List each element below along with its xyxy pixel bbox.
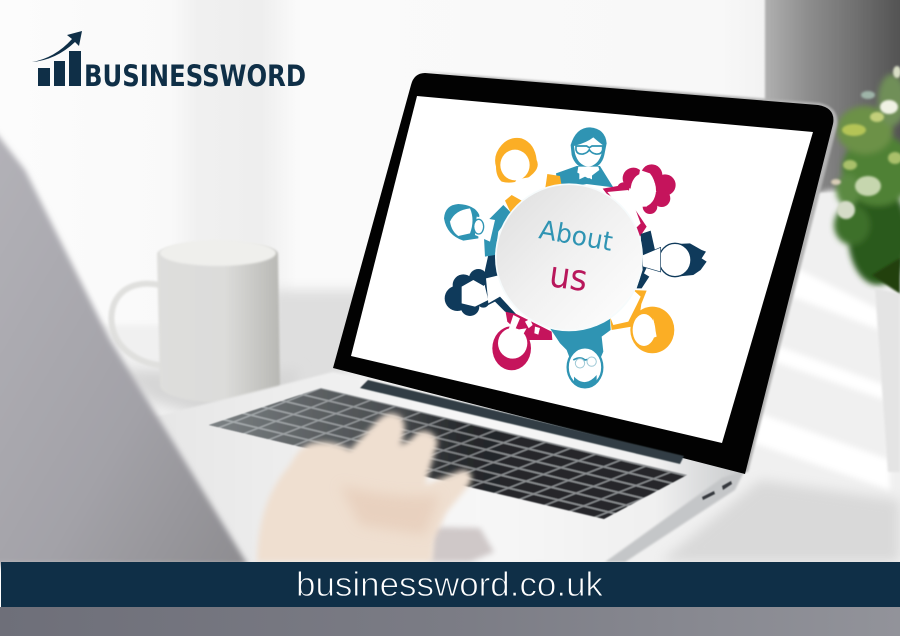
photo background: wall and curtains <box>0 0 900 345</box>
about us graphic <box>444 127 707 387</box>
person: yellow woman bottom right <box>610 290 674 353</box>
dark wall top right <box>765 0 900 193</box>
desk shade behind mug <box>270 290 400 400</box>
plant pot <box>875 288 900 472</box>
person: navy woman left <box>445 254 516 316</box>
coffee mug <box>111 240 280 402</box>
person: magenta man bottom left <box>492 308 552 370</box>
about label: About <box>537 215 615 258</box>
logo arrow <box>32 31 82 62</box>
keyboard <box>209 388 687 519</box>
person: yellow woman top left <box>495 138 562 213</box>
laptop side with ports <box>605 470 745 562</box>
desk shadow near mug <box>120 370 300 415</box>
person: magenta woman top right <box>603 164 676 237</box>
white screen <box>351 96 813 443</box>
person: teal man bottom <box>550 318 611 387</box>
person shoulder in foreground <box>0 125 248 565</box>
white desk <box>0 190 900 570</box>
person: navy man right <box>637 231 707 288</box>
center disc <box>495 183 643 331</box>
website address: businessword.co.uk <box>296 566 604 604</box>
footer banner <box>1 562 900 607</box>
hinge band <box>360 380 684 464</box>
desk shade lower right <box>660 480 900 562</box>
person: teal man with glasses <box>556 127 613 189</box>
person: teal man left <box>444 204 512 257</box>
plant <box>831 66 900 294</box>
laptop base <box>150 372 745 562</box>
logo <box>32 31 306 93</box>
bottom grey strip <box>0 607 900 636</box>
logo bars <box>38 51 81 86</box>
hand <box>257 413 471 562</box>
laptop <box>150 71 837 562</box>
black bezel <box>333 73 833 474</box>
us label: us <box>547 254 590 300</box>
screen back edge <box>416 71 837 472</box>
trackpad shadow <box>430 527 494 562</box>
window light on desk <box>745 265 890 490</box>
logo wordmark: BUSINESSWORD <box>84 59 306 93</box>
